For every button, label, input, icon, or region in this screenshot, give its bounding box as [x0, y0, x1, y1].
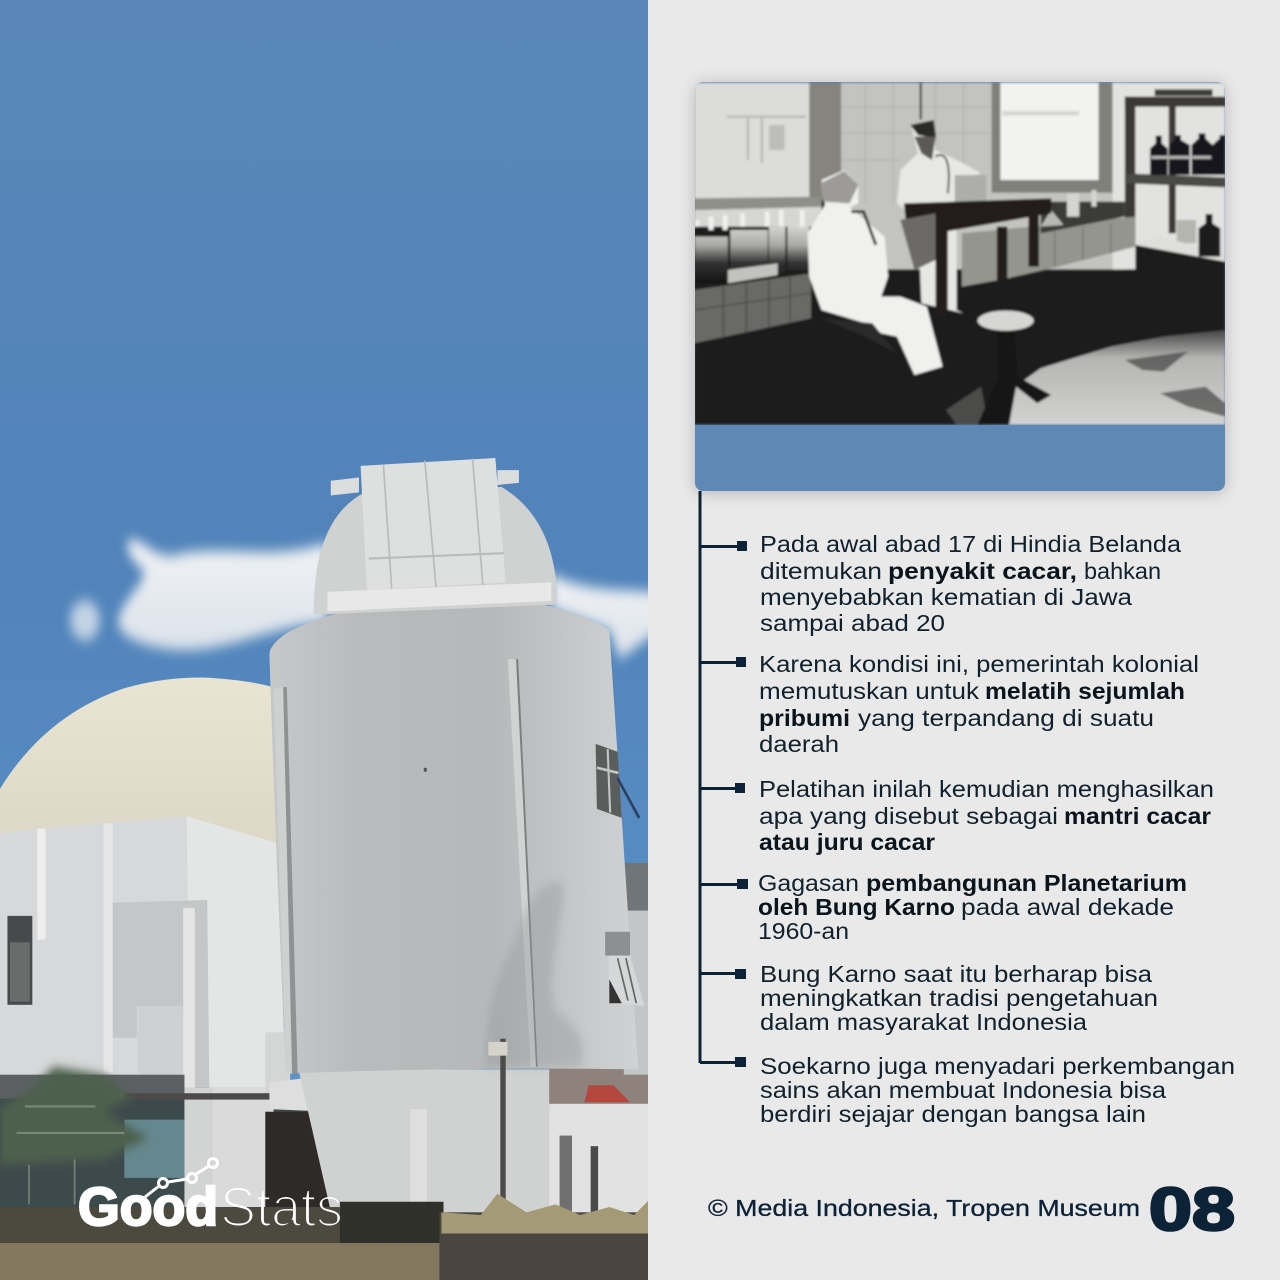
text block 2: Karena kondisi ini, pemerintah kolonial: [759, 651, 1199, 677]
text block 5: dalam masyarakat Indonesia: [760, 1009, 1087, 1035]
text block 5: Bung Karno saat itu berharap bisa: [760, 961, 1152, 987]
ground and planting: [0, 1207, 340, 1244]
text block 5: [760, 961, 1158, 1035]
under-counter shadow: [1134, 244, 1225, 272]
text block 3: mantri cacar: [1064, 803, 1211, 829]
branch 6: [700, 1057, 746, 1067]
right panel background: [648, 0, 1280, 1280]
text block 3: apa yang disebut sebagai: [759, 803, 1058, 829]
text block 6: sains akan membuat Indonesia bisa: [760, 1077, 1166, 1103]
text block 3: [759, 776, 1214, 855]
tiled wall: [841, 83, 1125, 269]
round stool: [978, 311, 1051, 425]
text block 4: 1960-an: [758, 918, 849, 944]
text block 2: yang terpandang di suatu: [858, 705, 1154, 731]
text block 4: pada awal dekade: [961, 894, 1174, 920]
branch 3: [700, 783, 745, 793]
text block 4: Gagasan: [758, 870, 859, 896]
logo: GoodStats: [78, 1158, 343, 1238]
standing man: [897, 120, 981, 313]
card: lab photo with blue band: [694, 82, 1225, 491]
text block 1: ditemukan: [760, 558, 882, 584]
tree: [0, 1067, 149, 1204]
text block 5: meningkatkan tradisi pengetahuan: [760, 985, 1158, 1011]
source credit: © Media Indonesia, Tropen Museum: [708, 1195, 1140, 1221]
text block 4: pembangunan Planetarium: [866, 870, 1187, 896]
text block 6: berdiri sejajar dengan bangsa lain: [760, 1101, 1146, 1127]
glassware on counter: [1067, 193, 1079, 217]
text block 2: melatih sejumlah: [985, 678, 1185, 704]
text block 1: [760, 531, 1181, 636]
shelves: [1113, 83, 1225, 269]
table: [904, 198, 1051, 317]
right window: [992, 83, 1113, 193]
left window: [694, 83, 810, 199]
text block 1: menyebabkan kematian di Jawa: [760, 584, 1132, 610]
building illustration: [0, 458, 663, 1280]
seated man: [807, 170, 943, 375]
lamp post: [500, 1039, 506, 1232]
back counter: [962, 217, 1135, 287]
shelf bottles: [1150, 133, 1225, 175]
logo wordmark light: Stats: [220, 1175, 343, 1238]
text block 3: Pelatihan inilah kemudian menghasilkan: [759, 776, 1214, 802]
page number: 08: [1149, 1176, 1235, 1243]
text block 4: oleh Bung Karno: [758, 894, 955, 920]
lit floor: [981, 330, 1225, 425]
text block 6: Soekarno juga menyadari perkembangan: [760, 1053, 1235, 1079]
tower window lower: [605, 932, 645, 1006]
text block 6: [760, 1053, 1235, 1127]
text block 1: penyakit cacar,: [888, 558, 1077, 584]
card base: [695, 82, 1225, 491]
branch 1: [700, 541, 747, 551]
tower window upper: [596, 744, 639, 818]
black and white lab photo: [694, 83, 1225, 425]
right background structure: [624, 863, 650, 911]
text block 1: Pada awal abad 17 di Hindia Belanda: [760, 531, 1181, 557]
text block 3: atau juru cacar: [759, 829, 935, 855]
text block 2: memutuskan untuk: [759, 678, 980, 704]
text block 2: [759, 651, 1199, 757]
timeline connector: [698, 491, 748, 1067]
text block 1: bahkan: [1084, 558, 1161, 584]
photo: planetarium building with blue sky: [0, 0, 663, 1280]
text block 2: daerah: [759, 731, 839, 757]
text block 4: [758, 870, 1187, 944]
left bottles: [694, 207, 822, 285]
observatory dome: [314, 458, 558, 614]
branch 5: [700, 969, 746, 979]
branch 2: [700, 657, 746, 667]
sky: [0, 0, 648, 1080]
logo icon: trend line: [145, 1158, 218, 1197]
branch 4: [700, 879, 748, 889]
lower tower: [298, 1069, 555, 1215]
text block 1: sampai abad 20: [760, 610, 945, 636]
text block 2: pribumi: [759, 705, 850, 731]
logo wordmark: Good: [78, 1177, 218, 1237]
main cylinder tower: [269, 596, 638, 1074]
